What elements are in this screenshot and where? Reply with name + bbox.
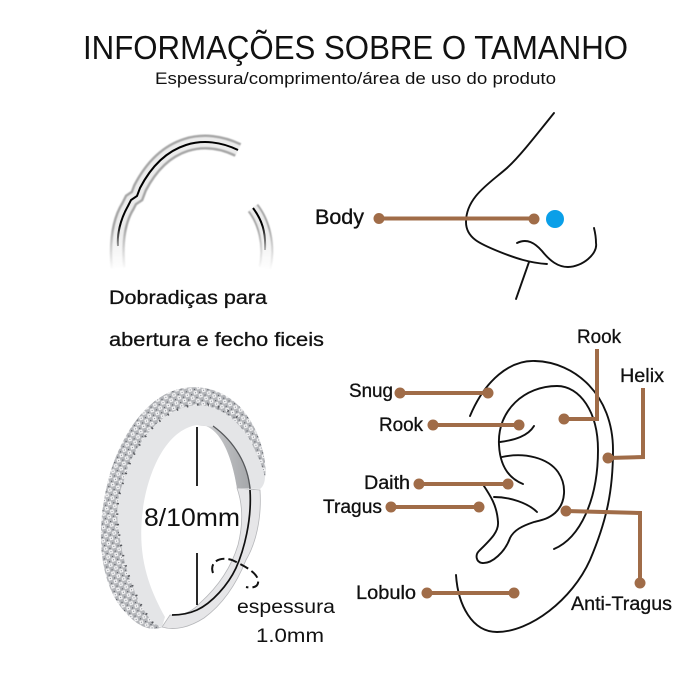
connector: Rook left bbox=[428, 420, 524, 430]
connector: Lobulo bbox=[422, 588, 520, 598]
label: 1.0mm: 1.0mm bbox=[256, 626, 324, 647]
gem band bbox=[101, 387, 266, 629]
nose diagram bbox=[374, 113, 596, 299]
pave ring illustration bbox=[101, 387, 266, 629]
diameter line bottom bbox=[196, 553, 198, 605]
label: Body: Body bbox=[315, 206, 365, 229]
text: abertura e fecho ficeis bbox=[109, 330, 324, 351]
label: Lobulo: Lobulo bbox=[356, 583, 416, 604]
gem prongs bbox=[117, 404, 240, 623]
label: Rook left: Rook bbox=[379, 415, 423, 436]
label: Helix: Helix bbox=[620, 366, 665, 387]
title: INFORMAÇÕES SOBRE O TAMANHO bbox=[83, 29, 628, 66]
connector: Tragus bbox=[386, 502, 484, 512]
thickness dashed outline bbox=[212, 559, 258, 588]
label: Snug: Snug bbox=[349, 381, 393, 402]
label: espessura: espessura bbox=[237, 597, 335, 618]
hinge wire bbox=[162, 488, 260, 629]
silver body bbox=[101, 387, 266, 629]
connector: Snug bbox=[394, 388, 494, 398]
label: Daith: Daith bbox=[364, 473, 410, 494]
connector: Daith bbox=[414, 478, 514, 490]
connector: Rook right bbox=[558, 349, 597, 424]
connector: Anti-Tragus bbox=[560, 506, 646, 588]
subtitle: Espessura/comprimento/área de uso do produto bbox=[155, 70, 556, 88]
label: Tragus: Tragus bbox=[323, 497, 382, 518]
hinged ring illustration bbox=[117, 142, 267, 268]
ring caption: Dobradiças para bbox=[109, 288, 267, 309]
label: 8/10mm: 8/10mm bbox=[144, 504, 240, 532]
diameter line top bbox=[196, 427, 198, 486]
connector: Helix bbox=[602, 388, 643, 464]
label: Rook top: Rook bbox=[577, 327, 621, 348]
ear diagram bbox=[456, 361, 613, 632]
inner face shading bbox=[197, 425, 251, 488]
blue piercing dot bbox=[546, 210, 564, 228]
label: Anti-Tragus: Anti-Tragus bbox=[571, 594, 672, 615]
